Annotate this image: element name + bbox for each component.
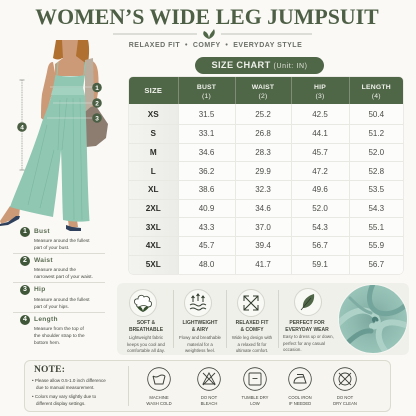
size chart table: L	[151, 167, 156, 176]
feature: lightweight and airy: material for a	[187, 342, 213, 346]
hip guide: Hip	[34, 286, 46, 293]
size chart table: 26.8	[255, 129, 271, 138]
feature: relaxed fit and comfy: ultimate comfort.	[236, 348, 268, 353]
size chart table: 56.7	[368, 260, 384, 269]
fabric swirl photo	[339, 285, 407, 353]
size chart table: XS	[148, 110, 159, 118]
label: cool iron: IF NEEDED	[289, 401, 311, 406]
size chart table: 56.7	[312, 241, 328, 250]
feature: soft and breathable: Lightweight fabric	[129, 335, 163, 340]
size chart table: 52.0	[368, 148, 384, 157]
size chart table: 45.7	[312, 148, 328, 157]
feature: relaxed fit and comfy: & COMFY	[240, 327, 264, 333]
label: do not dry clean	[333, 395, 357, 406]
size chart table: 3XL	[146, 223, 161, 232]
waist guide: 2	[23, 257, 27, 264]
label: do not dry clean: DO NOT	[337, 395, 353, 400]
size chart table: 44.1	[312, 129, 328, 138]
size chart table: XL	[148, 185, 158, 194]
feature: lightweight and airy: LIGHTWEIGHT	[182, 320, 218, 326]
icon: leaf	[294, 288, 322, 316]
icon: do not dry clean	[333, 367, 357, 391]
waist guide: narrowest part of your waist.	[34, 274, 93, 279]
icon: expanding arrows	[237, 289, 265, 317]
size chart table: 40.9	[199, 204, 214, 213]
model illustration with measurement markers: 3	[95, 116, 99, 122]
size chart table: 51.2	[368, 129, 384, 138]
label: cool iron: COOL IRON	[288, 395, 312, 400]
size chart table: SIZE	[144, 86, 162, 95]
decorative title divider with leaf icon	[113, 29, 312, 39]
length guide: bottom hem.	[34, 340, 60, 345]
feature: perfect for everyday wear: occasion.	[283, 347, 302, 352]
size chart table: 39.4	[255, 241, 271, 250]
waist guide	[20, 256, 93, 279]
size chart table: 34.6	[255, 204, 271, 213]
size chart table: 42.5	[312, 110, 328, 118]
skin	[0, 40, 99, 228]
size chart table: 28.3	[255, 148, 271, 157]
title: WOMEN’S WIDE LEG JUMPSUIT	[35, 4, 379, 29]
size chart table: (1)	[202, 93, 211, 100]
note text	[32, 378, 106, 406]
size chart heading pill	[195, 57, 324, 74]
hip guide	[20, 285, 90, 309]
care panel divider	[128, 366, 129, 406]
label: tumble dry low	[242, 395, 268, 406]
size chart table: 54.3	[368, 204, 384, 213]
model illustration with measurement markers: 2	[95, 100, 99, 108]
size chart table: 34.6	[199, 148, 214, 157]
size chart table: 43.3	[199, 223, 214, 232]
hair	[53, 40, 89, 68]
size chart table: (2)	[259, 93, 267, 100]
size chart table: HIP	[314, 84, 326, 90]
icon: do not bleach	[197, 367, 221, 391]
feature: relaxed fit and comfy: RELAXED FIT	[236, 320, 268, 326]
size chart table	[129, 77, 403, 274]
size chart table: 52.0	[312, 204, 328, 213]
note heading: NOTE:	[34, 365, 65, 375]
bust guide: Bust	[34, 228, 50, 235]
size chart table: (4)	[372, 93, 381, 100]
features panel	[117, 283, 409, 355]
sandals	[0, 216, 81, 231]
size chart table: WAIST	[252, 84, 274, 90]
size chart table: 48.0	[199, 260, 214, 269]
label: do not dry clean: DRY CLEAN	[333, 401, 357, 406]
feature: soft and breathable	[127, 289, 165, 353]
label: machine wash cold: WASH COLD	[146, 401, 172, 406]
label: do not bleach: DO NOT	[201, 395, 217, 400]
bust guide: 1	[23, 228, 27, 235]
size chart heading pill: SIZE CHART (Unit: IN)	[211, 60, 308, 70]
feature: lightweight and airy	[179, 289, 221, 353]
size chart table: 32.3	[255, 185, 271, 194]
icon: tumble dry low	[243, 367, 267, 391]
note and care panel	[24, 360, 391, 412]
bust guide	[20, 227, 90, 250]
length guide: Length	[34, 316, 58, 323]
icon: machine wash cold	[147, 367, 171, 391]
feature: lightweight and airy: Flowy and breathable	[179, 335, 221, 340]
size chart table: 2XL	[146, 204, 161, 213]
feature: soft and breathable: comfortable all day.	[127, 348, 165, 353]
length guide: the shoulder strap to the	[34, 333, 85, 338]
feature: relaxed fit and comfy: Wide leg design with	[232, 335, 272, 340]
feature: relaxed fit and comfy	[232, 289, 272, 353]
label: tumble dry low: TUMBLE DRY	[242, 395, 268, 400]
measurement line	[20, 80, 93, 170]
feature: perfect for everyday wear: Easy to dress up or down,	[283, 334, 334, 339]
length guide	[20, 315, 85, 345]
size chart table: 31.5	[199, 110, 214, 118]
size chart table: 37.0	[255, 223, 271, 232]
size chart table: 33.1	[199, 129, 214, 138]
hip guide: Measure around the fullest	[34, 296, 90, 302]
size chart table: 53.5	[368, 185, 384, 194]
feature: soft and breathable: BREATHABLE	[129, 327, 163, 333]
size chart table: 45.7	[199, 241, 214, 250]
size chart table: 55.1	[368, 223, 384, 232]
size chart table: 38.6	[199, 185, 214, 194]
feature: soft and breathable: keeps you cool and	[127, 342, 165, 346]
label: machine wash cold	[146, 395, 172, 406]
label: do not bleach	[200, 395, 218, 406]
label: machine wash cold: MACHINE	[149, 395, 169, 400]
bust guide: Measure around the fullest	[34, 238, 90, 242]
label: do not bleach: BLEACH	[201, 401, 217, 406]
waist guide: Measure around the	[34, 266, 76, 272]
note text: due to manual measurement.	[36, 385, 95, 390]
feature: relaxed fit and comfy: a relaxed fit for	[237, 342, 267, 346]
length guide: 4	[23, 316, 27, 323]
model illustration with measurement markers	[0, 40, 108, 231]
model illustration with measurement markers: 4	[20, 124, 24, 132]
measuring guide	[13, 227, 105, 345]
label: tumble dry low: LOW	[250, 401, 260, 406]
size chart table: 50.4	[368, 110, 384, 118]
label: cool iron	[288, 395, 312, 406]
note text: different display settings.	[36, 401, 85, 406]
measurement markers	[17, 83, 102, 132]
size chart table: 59.1	[312, 260, 328, 269]
size chart table: BUST	[197, 84, 216, 90]
model illustration with measurement markers: 1	[95, 85, 99, 92]
feature: perfect for everyday wear: EVERYDAY WEAR	[285, 327, 329, 333]
size chart table: 36.2	[199, 167, 214, 176]
feature: perfect for everyday wear: PERFECT FOR	[289, 320, 325, 326]
size chart table: M	[150, 148, 157, 157]
size chart table: S	[151, 129, 156, 138]
icon: airflow arrows	[184, 289, 212, 317]
size chart table: 55.9	[368, 241, 384, 250]
size chart table: 49.6	[312, 185, 328, 194]
icon: cotton	[129, 289, 157, 317]
jumpsuit	[10, 75, 90, 222]
feature: perfect for everyday wear	[283, 288, 334, 352]
note text: • Please allow 0.5-1.0 inch difference	[32, 378, 106, 382]
size chart table: LENGTH	[362, 84, 391, 90]
size chart table: 29.9	[255, 167, 271, 176]
size chart table: 47.2	[312, 167, 328, 176]
bag	[83, 106, 108, 147]
size chart table: 54.3	[312, 223, 328, 232]
hip guide: part of your hips.	[34, 304, 69, 309]
feature: soft and breathable: SOFT &	[137, 320, 155, 326]
feature: lightweight and airy: & AIRY	[192, 327, 208, 333]
note text: • Colors may vary slightly due to	[32, 394, 96, 398]
subtitle: RELAXED FIT • COMFY • EVERYDAY STYLE	[129, 42, 302, 49]
feature: perfect for everyday wear: perfect for any casual	[283, 340, 325, 346]
size chart table: 41.7	[255, 260, 271, 269]
size chart table: 25.2	[255, 110, 271, 118]
size chart table: 5XL	[146, 260, 161, 269]
size chart table: 4XL	[146, 241, 161, 250]
size chart table: 52.8	[368, 167, 384, 176]
icon: cool iron	[288, 367, 312, 391]
size chart table: (3)	[316, 93, 324, 100]
feature: lightweight and airy: weightless feel.	[185, 348, 215, 353]
waist guide: Waist	[34, 257, 53, 264]
length guide: Measure from the top of	[34, 326, 84, 330]
hip guide: 3	[23, 286, 27, 293]
bust guide: part of your bust.	[34, 245, 69, 250]
